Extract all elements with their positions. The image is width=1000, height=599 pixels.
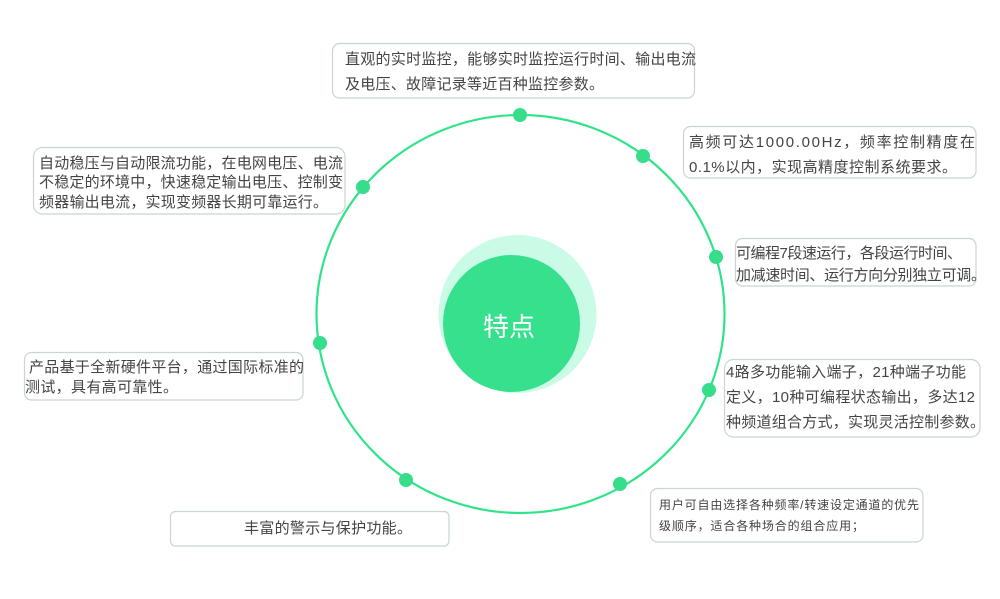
panel: high frequency <box>684 126 976 178</box>
central badge <box>438 235 596 393</box>
panel: channel priority: 用户可自由选择各种频率/转速设定通道的优先 <box>659 497 919 512</box>
panel: auto voltage and current limiting: 不稳定的环境中，快速稳定输出电压、控制变 <box>39 173 343 191</box>
badge halo <box>438 235 596 393</box>
panel: hardware platform: 测试，具有高可靠性。 <box>25 379 178 396</box>
panel: seven-speed programming <box>736 238 986 286</box>
large ring <box>316 115 724 513</box>
panel: real-time monitoring: 及电压、故障记录等近百种监控参数。 <box>345 75 604 93</box>
panel: real-time monitoring: 直观的实时监控，能够实时监控运行时间、输出电流 <box>345 51 696 68</box>
panel: warning and protection: 丰富的警示与保护功能。 <box>244 519 412 537</box>
panel: warning and protection <box>170 512 449 546</box>
panel: hardware platform <box>24 352 304 400</box>
panel: multi-function inputs <box>724 360 985 437</box>
panel: auto voltage and current limiting: 自动稳压与自动限流功能，在电网电压、电流 <box>39 155 343 172</box>
panel: high frequency: 高频可达1000.00Hz，频率控制精度在 <box>689 134 975 151</box>
panel: seven-speed programming: 加减速时间、运行方向分别独立可调。 <box>736 267 986 284</box>
panel: seven-speed programming: 可编程7段速运行，各段运行时间、 <box>736 245 962 262</box>
panel: real-time monitoring <box>332 44 696 98</box>
panel: multi-function inputs: 种频道组合方式，实现灵活控制参数。 <box>726 414 985 431</box>
panel: channel priority: 级顺序，适合各种场合的组合应用； <box>659 518 864 533</box>
panel: multi-function inputs: 定义，10种可编程状态输出，多达12 <box>726 389 975 406</box>
panel: high frequency: 0.1%以内，实现高精度控制系统要求。 <box>689 159 957 176</box>
badge disc <box>443 255 580 392</box>
panel: channel priority <box>650 488 923 542</box>
badge title: 特点 <box>483 312 535 342</box>
panel: hardware platform: 产品基于全新硬件平台，通过国际标准的 <box>29 358 304 376</box>
panel: multi-function inputs: 4路多功能输入端子，21种端子功能 <box>726 364 966 381</box>
panel: auto voltage and current limiting <box>34 148 345 214</box>
panel: auto voltage and current limiting: 频器输出电流，实现变频器长期可靠运行。 <box>39 194 328 211</box>
ring nodes <box>313 108 723 491</box>
